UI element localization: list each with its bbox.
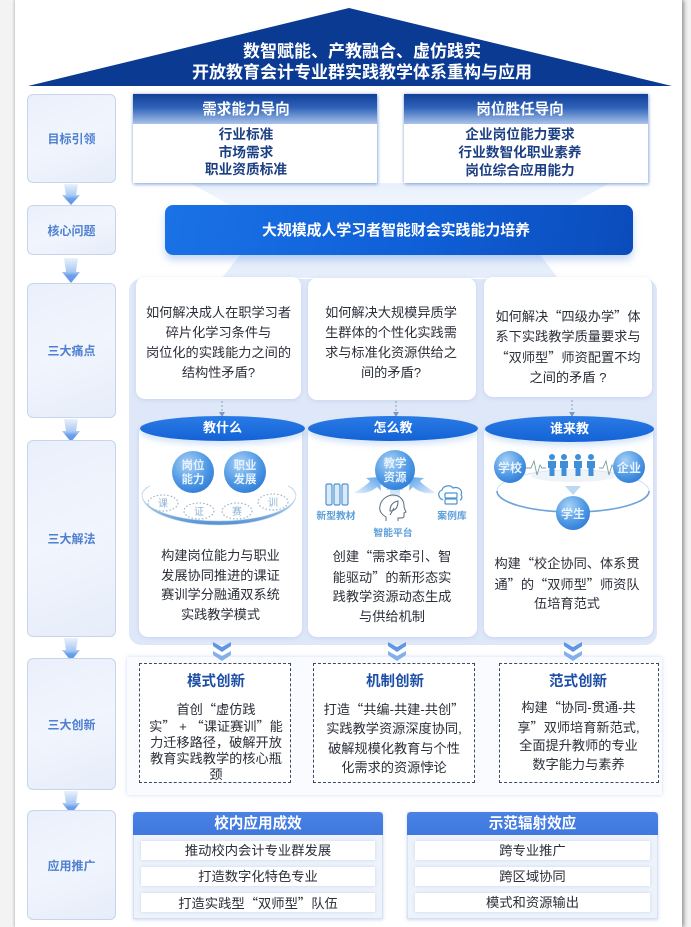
label: application: 应用推广	[47, 858, 96, 872]
diagram: school enterprise student	[494, 451, 650, 530]
text: model innovation: 颈	[209, 767, 223, 782]
icon: career development ball	[224, 451, 266, 493]
labels: 新型教材	[316, 509, 356, 522]
text: pain point 2: 生群体的个性化实践需	[325, 325, 457, 340]
card: solution 3	[484, 425, 653, 637]
icon: job ability ball: 岗位	[182, 458, 204, 472]
heading: campus results	[133, 812, 383, 835]
connectors: pain to solution	[219, 400, 575, 416]
list: demand items: 行业标准	[219, 127, 273, 142]
heading: job competency: 岗位胜任导向	[476, 102, 564, 118]
icon: cloud database	[439, 486, 462, 504]
diagram: job ability and career development	[142, 451, 296, 526]
icon: people	[548, 454, 595, 476]
row: 打造实践型“双师型”队伍	[178, 893, 338, 912]
text: solution 3: 构建“校企协同、体系贯	[494, 553, 640, 572]
text: pain point 2: 如何解决大规模异质学	[325, 305, 457, 320]
label: pain points: 三大痛点	[47, 344, 96, 358]
text: pain point 3: 系下实践教学质量要求与	[495, 329, 641, 344]
labels	[316, 509, 467, 539]
heading: mechanism innovation: 机制创新	[366, 674, 424, 690]
text: solution 2: 践教学资源动态生成	[333, 589, 451, 604]
text: mechanism innovation: 化需求的资源悖论	[341, 760, 447, 775]
text: pain point 3: “双师型”师资配置不均	[495, 347, 641, 366]
text: paradigm innovation: 构建“协同-贯通-共	[521, 697, 636, 716]
text: mechanism innovation: 打造“共编-共建-共创”	[324, 699, 464, 718]
text: paradigm innovation: 全面提升教师的专业	[519, 738, 638, 753]
text: pain point 2: 间的矛盾?	[361, 365, 421, 380]
title	[192, 42, 532, 82]
dotted ring labels: 训	[268, 497, 278, 509]
icon: school ball	[494, 451, 526, 483]
label: solutions: 三大解法	[47, 532, 96, 546]
card: pain point 3	[484, 277, 652, 397]
heading: how to teach	[308, 416, 478, 441]
text: solution 1: 构建岗位能力与职业	[161, 548, 280, 563]
row: 跨区域协同	[499, 869, 566, 884]
text: mechanism innovation	[324, 699, 464, 775]
row	[141, 867, 375, 886]
text: solution 2	[333, 546, 451, 624]
dotted ring outlines	[148, 494, 288, 519]
icon: enterprise ball	[613, 451, 645, 483]
row: 推动校内会计专业群发展	[185, 843, 331, 858]
list: job items: 岗位综合应用能力	[465, 163, 575, 178]
text: model innovation	[149, 699, 283, 782]
list: demand items: 职业资质标准	[205, 162, 287, 177]
label: application	[27, 810, 116, 920]
text: model innovation: 首创“虚仿践	[176, 699, 256, 718]
label: core issue	[27, 205, 116, 255]
text: pain point 1: 结构性矛盾?	[182, 365, 255, 380]
icon: student ball: 学生	[561, 506, 585, 521]
text: model innovation: 力迁移路径，破解开放	[150, 735, 282, 750]
roof banner	[28, 8, 672, 86]
dotted ring labels	[158, 497, 278, 518]
panel: job competency orientation	[404, 94, 648, 183]
heading: who teaches	[485, 416, 654, 442]
label: core issue: 核心问题	[47, 224, 96, 238]
labels: 案例库	[437, 509, 467, 522]
label: goal: 目标引领	[47, 132, 96, 146]
row	[415, 867, 650, 886]
text: solution 2: 与供给机制	[359, 608, 425, 624]
text: paradigm innovation: 数字能力与素养	[532, 757, 625, 772]
heading: who teaches: 谁来教	[550, 421, 589, 436]
dotted ring labels: 证	[194, 506, 204, 518]
icon: head with leaf	[380, 495, 406, 521]
text: solution 2: 创建“需求牵引、智	[333, 546, 451, 565]
row: 打造数字化特色专业	[198, 869, 318, 884]
text: pain point 1: 岗位化的实践能力之间的	[146, 345, 291, 360]
heading: demand orientation: 需求能力导向	[202, 102, 290, 118]
core problem bar: 大规模成人学习者智能财会实践能力培养	[262, 223, 530, 239]
box: model innovation	[139, 663, 291, 783]
diagram: teaching resources	[316, 450, 467, 539]
chevrons: solutions to innovations	[213, 642, 582, 661]
text: pain point 3	[495, 306, 641, 385]
card: pain point 1	[136, 277, 301, 399]
icon: school ball: 学校	[498, 460, 522, 475]
text: solution 3	[494, 553, 640, 611]
labels: 智能平台	[373, 526, 413, 539]
arrow: step 5	[62, 791, 80, 810]
list: job items: 行业数智化职业素养	[458, 145, 582, 160]
arrow: step 2	[62, 258, 80, 283]
heartbeat lines	[526, 461, 616, 475]
icon: career development ball: 发展	[234, 472, 257, 486]
icon: student ball	[556, 496, 590, 530]
icon: career development ball: 职业	[234, 459, 256, 472]
arrows to resource ball	[354, 477, 436, 497]
row	[141, 841, 375, 860]
bowl arc	[142, 495, 296, 525]
text: solution 1: 赛训学分融通双系统	[161, 587, 280, 602]
list: demand items	[205, 127, 287, 177]
heading: model innovation: 模式创新	[187, 674, 245, 690]
label: solutions	[27, 440, 116, 637]
arrow: step 4	[62, 638, 80, 658]
icon: job ability ball	[172, 451, 214, 493]
bowl rim	[142, 486, 296, 495]
row	[415, 841, 650, 860]
text: pain point 2: 求与标准化资源供给之	[325, 345, 457, 360]
text: solution 1	[161, 548, 280, 622]
list: job items	[458, 127, 582, 178]
arrow: step 3	[62, 419, 80, 440]
icon: textbooks	[326, 484, 348, 505]
text: pain point 1: 如何解决成人在职学习者	[146, 305, 291, 320]
title: 数智赋能、产教融合、虚仿践实	[243, 42, 481, 61]
label: goal	[27, 94, 116, 183]
heading: job competency	[404, 94, 648, 124]
text: mechanism innovation: 实践教学资源深度协同,	[326, 721, 462, 736]
row: 跨专业推广	[499, 843, 566, 858]
box: mechanism innovation	[313, 663, 475, 783]
text: pain point 2	[325, 305, 457, 380]
panel: demand orientation	[133, 94, 377, 183]
text: pain point 1	[146, 305, 291, 380]
dotted ring labels: 赛	[232, 505, 242, 518]
heading: what to teach: 教什么	[203, 420, 242, 435]
row	[141, 893, 375, 912]
core problem bar	[165, 205, 633, 255]
heading: paradigm innovation: 范式创新	[549, 674, 607, 690]
icon: resource ball: 教学	[384, 456, 406, 470]
heading: demand orientation	[133, 94, 377, 124]
text: pain point 3: 之间的矛盾 ?	[530, 370, 606, 385]
text: solution 2: 能驱动”的新形态实	[333, 566, 451, 586]
card: pain point 2	[308, 278, 476, 400]
icon: job ability ball: 能力	[182, 472, 204, 486]
icon: resource ball	[375, 450, 415, 490]
label: pain points	[27, 283, 116, 418]
card: solution 2	[308, 425, 477, 637]
arrow: step 1	[62, 184, 80, 205]
text: solution 3: 通”的“双师型”师资队	[494, 574, 640, 592]
dotted ring labels: 课	[158, 498, 168, 510]
label: innovations	[27, 658, 116, 790]
text: pain point 3: 如何解决“四级办学”体	[495, 306, 641, 325]
text: paradigm innovation: 享”双师培育新范式,	[517, 717, 640, 736]
heading: demonstration effect	[407, 812, 658, 835]
background panel: pain points and solutions	[129, 279, 657, 645]
box: paradigm innovation	[499, 663, 659, 783]
row	[415, 893, 650, 912]
title: 开放教育会计专业群实践教学体系重构与应用	[192, 63, 532, 82]
icon: resource ball: 资源	[384, 470, 407, 484]
text: paradigm innovation	[517, 697, 640, 772]
label: innovations: 三大创新	[47, 718, 96, 732]
heading: demonstration effect: 示范辐射效应	[489, 816, 576, 832]
connecting glow bands	[192, 183, 608, 278]
panel: demonstration effect	[407, 812, 658, 919]
panel: campus results	[133, 812, 383, 919]
text: mechanism innovation: 破解规模化教育与个性	[328, 741, 460, 756]
heading: what to teach	[140, 416, 305, 441]
text: solution 1: 实践教学模式	[181, 606, 260, 622]
row: 模式和资源输出	[486, 895, 579, 910]
icon: enterprise ball: 企业	[617, 460, 641, 475]
arrow down to student	[565, 486, 581, 495]
text: model innovation: 教育实践教学的核心瓶	[150, 751, 282, 766]
panel: innovations	[127, 657, 662, 795]
list: demand items: 市场需求	[219, 144, 273, 160]
heading: how to teach: 怎么教	[373, 420, 412, 435]
text: solution 1: 发展协同推进的课证	[161, 568, 280, 582]
card: solution 1	[139, 425, 302, 637]
heading: campus results: 校内应用成效	[214, 816, 302, 832]
text: solution 3: 伍培育范式	[534, 596, 600, 611]
text: pain point 1: 碎片化学习条件与	[166, 325, 271, 340]
list: job items: 企业岗位能力要求	[465, 127, 575, 142]
text: model innovation: 实” + “课证赛训”能	[149, 716, 283, 735]
